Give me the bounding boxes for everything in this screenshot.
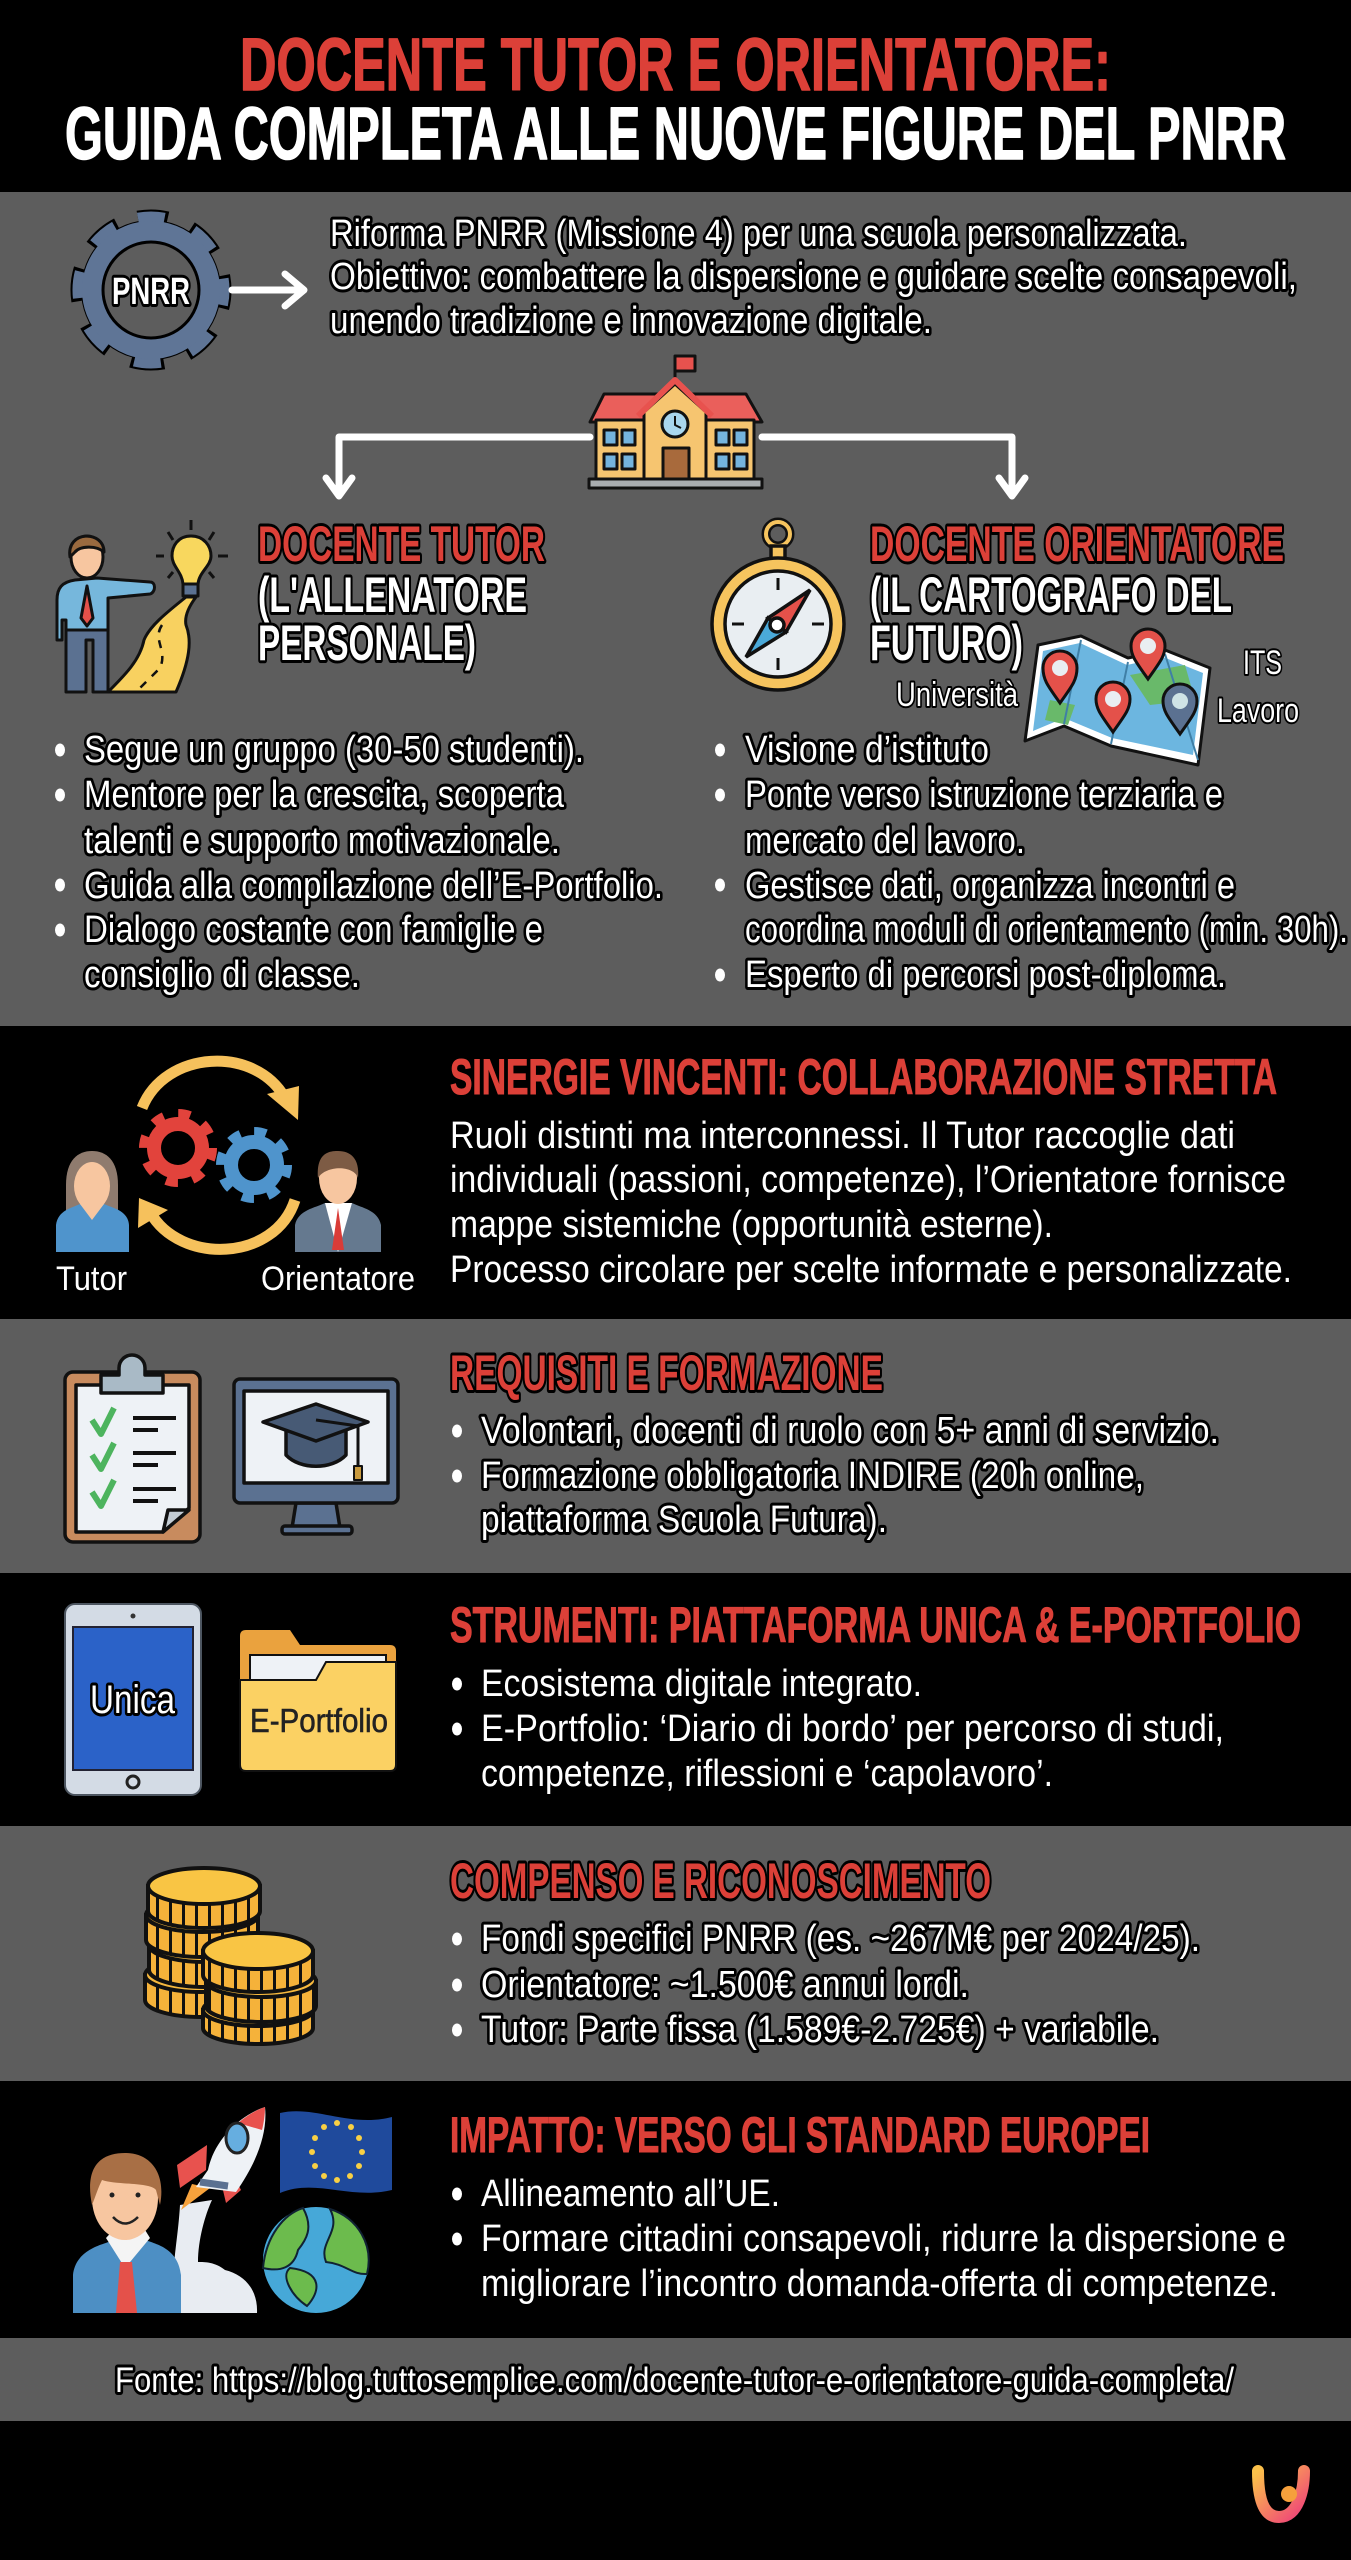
bullet list: piattaforma Scuola Futura).: [481, 1499, 887, 1541]
bullet list: Volontari, docenti di ruolo con 5+ anni di servizio.: [481, 1410, 1219, 1452]
bullet list: E-Portfolio: ‘Diario di bordo’ per percorso di studi,: [481, 1708, 1224, 1750]
icon: school building: [589, 356, 762, 488]
heading: docente tutor: (L'ALLENATORE: [258, 567, 527, 623]
map labels: Lavoro: [1217, 692, 1299, 730]
bullet list: [452, 2173, 1286, 2305]
panel: compenso e riconoscimento: [0, 1826, 1351, 2081]
icon: folder E-Portfolio: E-Portfolio: [250, 1702, 388, 1739]
tutor bullet list: [55, 729, 663, 996]
source text: Fonte: https://blog.tuttosemplice.com/docente-tutor-e-orientatore-guida-completa/: [115, 2361, 1234, 2400]
body text: Ruoli distinti ma interconnessi. Il Tutor raccoglie dati: [450, 1115, 1235, 1157]
tutor bullet list: Mentore per la crescita, scoperta: [84, 774, 565, 816]
bullet list: Fondi specifici PNRR (es. ~267M€ per 2024/25).: [481, 1918, 1200, 1960]
orientatore bullet list: Esperto di percorsi post-diploma.: [745, 954, 1226, 996]
icon: tablet Unica: [65, 1604, 201, 1795]
icon: rocket and smoke: [172, 2107, 265, 2313]
body text: [450, 1115, 1292, 1291]
bullet list: [452, 1663, 1224, 1795]
icon: teacher: [73, 2153, 181, 2313]
logo: [1258, 2471, 1304, 2517]
orientatore bullet list: [715, 729, 1348, 996]
map labels: Università: [896, 676, 1018, 714]
title header: [0, 0, 1351, 192]
icon: EU flag: [280, 2111, 392, 2193]
icon: PNRR gear: [68, 207, 234, 373]
heading: docente orientatore: [870, 516, 1284, 671]
icon labels: Tutor: [56, 1260, 127, 1298]
bullet list: Orientatore: ~1.500€ annui lordi.: [481, 1964, 969, 2006]
map labels: [896, 644, 1299, 730]
orientatore bullet list: Gestisce dati, organizza incontri e: [745, 865, 1235, 907]
icon: tutor figure with bulb and road: [57, 520, 228, 692]
heading: docente tutor: [258, 516, 545, 671]
tutor bullet list: Dialogo costante con famiglie e: [84, 909, 543, 951]
panel: sinergie vincenti: [0, 1026, 1351, 1319]
bullet list: Allineamento all’UE.: [481, 2173, 780, 2215]
heading: docente tutor: DOCENTE TUTOR: [258, 516, 545, 572]
panel: introduction and two roles: [0, 192, 1351, 1026]
bullet list: migliorare l’incontro domanda-offerta di competenze.: [481, 2263, 1278, 2305]
icon: collaboration cycle with gears and people: [56, 1061, 381, 1252]
bullet list: Formazione obbligatoria INDIRE (20h online,: [481, 1455, 1144, 1497]
icon: coin stacks: [145, 1868, 316, 2044]
heading: docente tutor: PERSONALE): [258, 615, 476, 671]
orientatore bullet list: Visione d’istituto: [745, 729, 989, 771]
icon: monitor with graduation cap: [234, 1379, 398, 1534]
heading: COMPENSO E RICONOSCIMENTO: [450, 1853, 991, 1909]
panel: requisiti e formazione: [0, 1319, 1351, 1573]
tutor bullet list: Segue un gruppo (30-50 studenti).: [84, 729, 584, 771]
orientatore bullet list: Ponte verso istruzione terziaria e: [745, 774, 1223, 816]
icon: globe: [263, 2207, 369, 2313]
icon: tablet Unica: Unica: [90, 1678, 176, 1722]
panel: impatto: [0, 2081, 1351, 2338]
icon: compass: [712, 522, 844, 690]
bullet list: [452, 1918, 1200, 2051]
intro text: [330, 213, 1297, 342]
tutor bullet list: talenti e supporto motivazionale.: [84, 820, 560, 862]
icon labels: Orientatore: [261, 1260, 415, 1298]
bullet list: competenze, riflessioni e ‘capolavoro’.: [481, 1753, 1053, 1795]
icon: folder E-Portfolio: [240, 1630, 396, 1771]
icon labels: [56, 1260, 415, 1298]
map labels: ITS: [1243, 644, 1282, 682]
bullet list: Ecosistema digitale integrato.: [481, 1663, 922, 1705]
intro text: Riforma PNRR (Missione 4) per una scuola personalizzata.: [330, 213, 1187, 255]
bullet list: [452, 1410, 1219, 1541]
orientatore bullet list: mercato del lavoro.: [745, 820, 1025, 862]
heading: docente orientatore: FUTURO): [870, 615, 1023, 671]
bullet list: Tutor: Parte fissa (1.589€-2.725€) + variabile.: [481, 2009, 1159, 2051]
icon: clipboard: [65, 1355, 200, 1542]
icon: PNRR gear: PNRR: [112, 271, 190, 313]
panel: strumenti: [0, 1573, 1351, 1826]
body text: mappe sistemiche (opportunità esterne).: [450, 1204, 1053, 1246]
panel: source: [0, 2338, 1351, 2421]
tutor bullet list: Guida alla compilazione dell’E-Portfolio.: [84, 865, 663, 907]
icon: map with pins: [1025, 629, 1210, 765]
tutor bullet list: consiglio di classe.: [84, 954, 360, 996]
intro text: unendo tradizione e innovazione digitale.: [330, 300, 932, 342]
arrows: school to both roles: [326, 437, 1025, 496]
heading: REQUISITI E FORMAZIONE: [450, 1345, 883, 1401]
arrow: gear to text: [232, 274, 304, 306]
